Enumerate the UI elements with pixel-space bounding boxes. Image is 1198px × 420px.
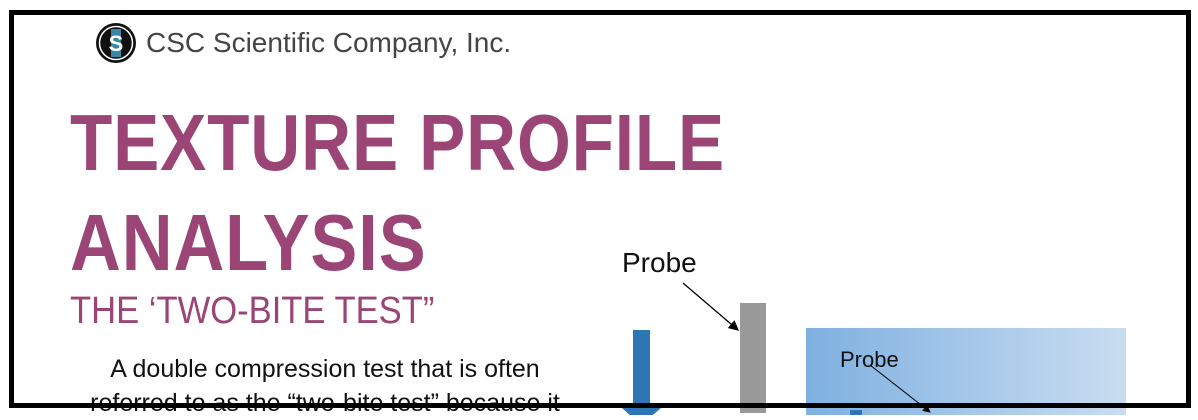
blue panel [806,328,1126,418]
subtitle: THE ‘TWO-BITE TEST” [70,290,434,332]
arrow to probe [683,283,738,330]
company name: CSC Scientific Company, Inc. [146,27,511,58]
description text: A double compression test that is often referred to as the “two-bite test” because it [90,355,560,417]
gray probe bar [740,303,766,413]
logo icon: S [109,31,123,56]
title line 1: TEXTURE PROFILE [70,98,725,187]
diagram: probe illustration: Probe [840,347,899,372]
logo icon [96,23,136,63]
blue down arrow [633,330,650,410]
title line 2: ANALYSIS [70,198,427,287]
diagram: probe illustration [622,247,1126,415]
probe label: Probe [622,247,697,278]
